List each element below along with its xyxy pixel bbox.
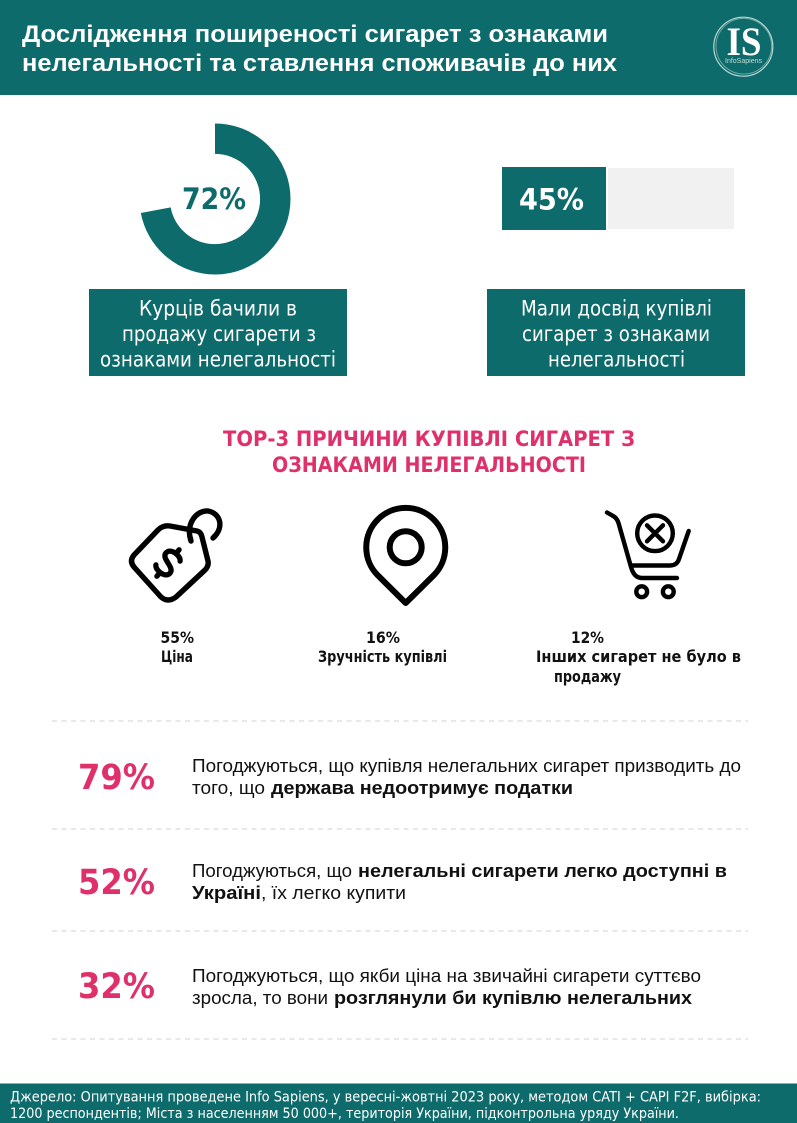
statistic row: 52%: нелегальні сигарети легко доступні в <box>358 861 727 881</box>
statistic row: 52%: , їх легко купити <box>261 883 406 903</box>
label box: purchase experience <box>487 289 745 376</box>
statistic row: 79% <box>78 756 741 798</box>
statistic row: 52%: Україні <box>192 883 261 903</box>
icon: price tag <box>132 511 220 600</box>
logo: InfoSapiens: IS <box>726 19 762 64</box>
icon: location pin <box>366 508 445 603</box>
statistic row: 32%: 32% <box>78 967 155 1007</box>
section heading <box>223 427 635 477</box>
label box: purchase experience: нелегальності <box>548 348 685 372</box>
label box: smokers saw: ознаками нелегальності <box>100 348 336 372</box>
reason: price <box>160 628 194 666</box>
statistic row: 32%: зросла, то вони <box>192 988 328 1008</box>
label box: smokers saw: Курців бачили в <box>139 296 297 320</box>
reason: no other cigarettes: продажу <box>554 667 621 686</box>
bar chart: 45%: 45% <box>519 182 584 216</box>
section heading: ТОР-3 ПРИЧИНИ КУПІВЛІ СИГАРЕТ З <box>223 427 635 451</box>
reason: no other cigarettes <box>536 628 741 686</box>
statistic row: 79%: Погоджуються, що купівля нелегальних сигарет призводить до <box>192 756 741 776</box>
logo: InfoSapiens <box>714 17 773 76</box>
reason: no other cigarettes: Інших сигарет не було в <box>536 647 741 666</box>
statistic row: 79%: того, що <box>192 778 265 798</box>
footer: source note: 1200 респондентів; Міста з населенням 50 000+, територія України, підконтрольна уряду України. <box>10 1106 679 1122</box>
reason: convenience <box>318 628 447 666</box>
title <box>22 21 618 77</box>
label box: purchase experience: Мали досвід купівлі <box>521 296 712 320</box>
logo: InfoSapiens: InfoSapiens <box>725 58 762 65</box>
statistic row: 52%: Погоджуються, що <box>192 861 352 881</box>
bar chart: 45% <box>502 167 734 230</box>
statistic row: 52% <box>78 861 727 903</box>
statistic row: 52%: 52% <box>78 863 155 903</box>
section heading: ОЗНАКАМИ НЕЛЕГАЛЬНОСТІ <box>272 453 586 477</box>
reason: no other cigarettes: 12% <box>571 628 604 647</box>
statistic row: 32%: розглянули би купівлю нелегальних <box>334 988 692 1008</box>
footer: source note <box>0 1084 797 1123</box>
reason: price: Ціна <box>161 647 193 666</box>
reason: convenience: 16% <box>366 628 400 647</box>
icon: shopping cart with cross <box>607 512 689 597</box>
statistic row: 79%: 79% <box>78 758 155 798</box>
reason: price: 55% <box>160 628 194 647</box>
donut chart: 72%: 72% <box>182 182 246 216</box>
label box: purchase experience: сигарет з ознаками <box>522 322 710 346</box>
title: нелегальності та ставлення споживачів до них <box>22 50 618 77</box>
donut chart: 72% <box>155 139 275 259</box>
reason: convenience: Зручність купівлі <box>318 647 447 666</box>
statistic row: 79%: держава недоотримує податки <box>271 778 573 798</box>
label box: smokers saw <box>89 289 347 376</box>
title: Дослідження поширеності сигарет з ознаками <box>22 21 608 48</box>
header banner <box>0 0 797 95</box>
statistic row: 32% <box>78 966 701 1008</box>
statistic row: 32%: Погоджуються, що якби ціна на звичайні сигарети суттєво <box>192 966 701 986</box>
label box: smokers saw: продажу сигарети з <box>122 322 316 346</box>
